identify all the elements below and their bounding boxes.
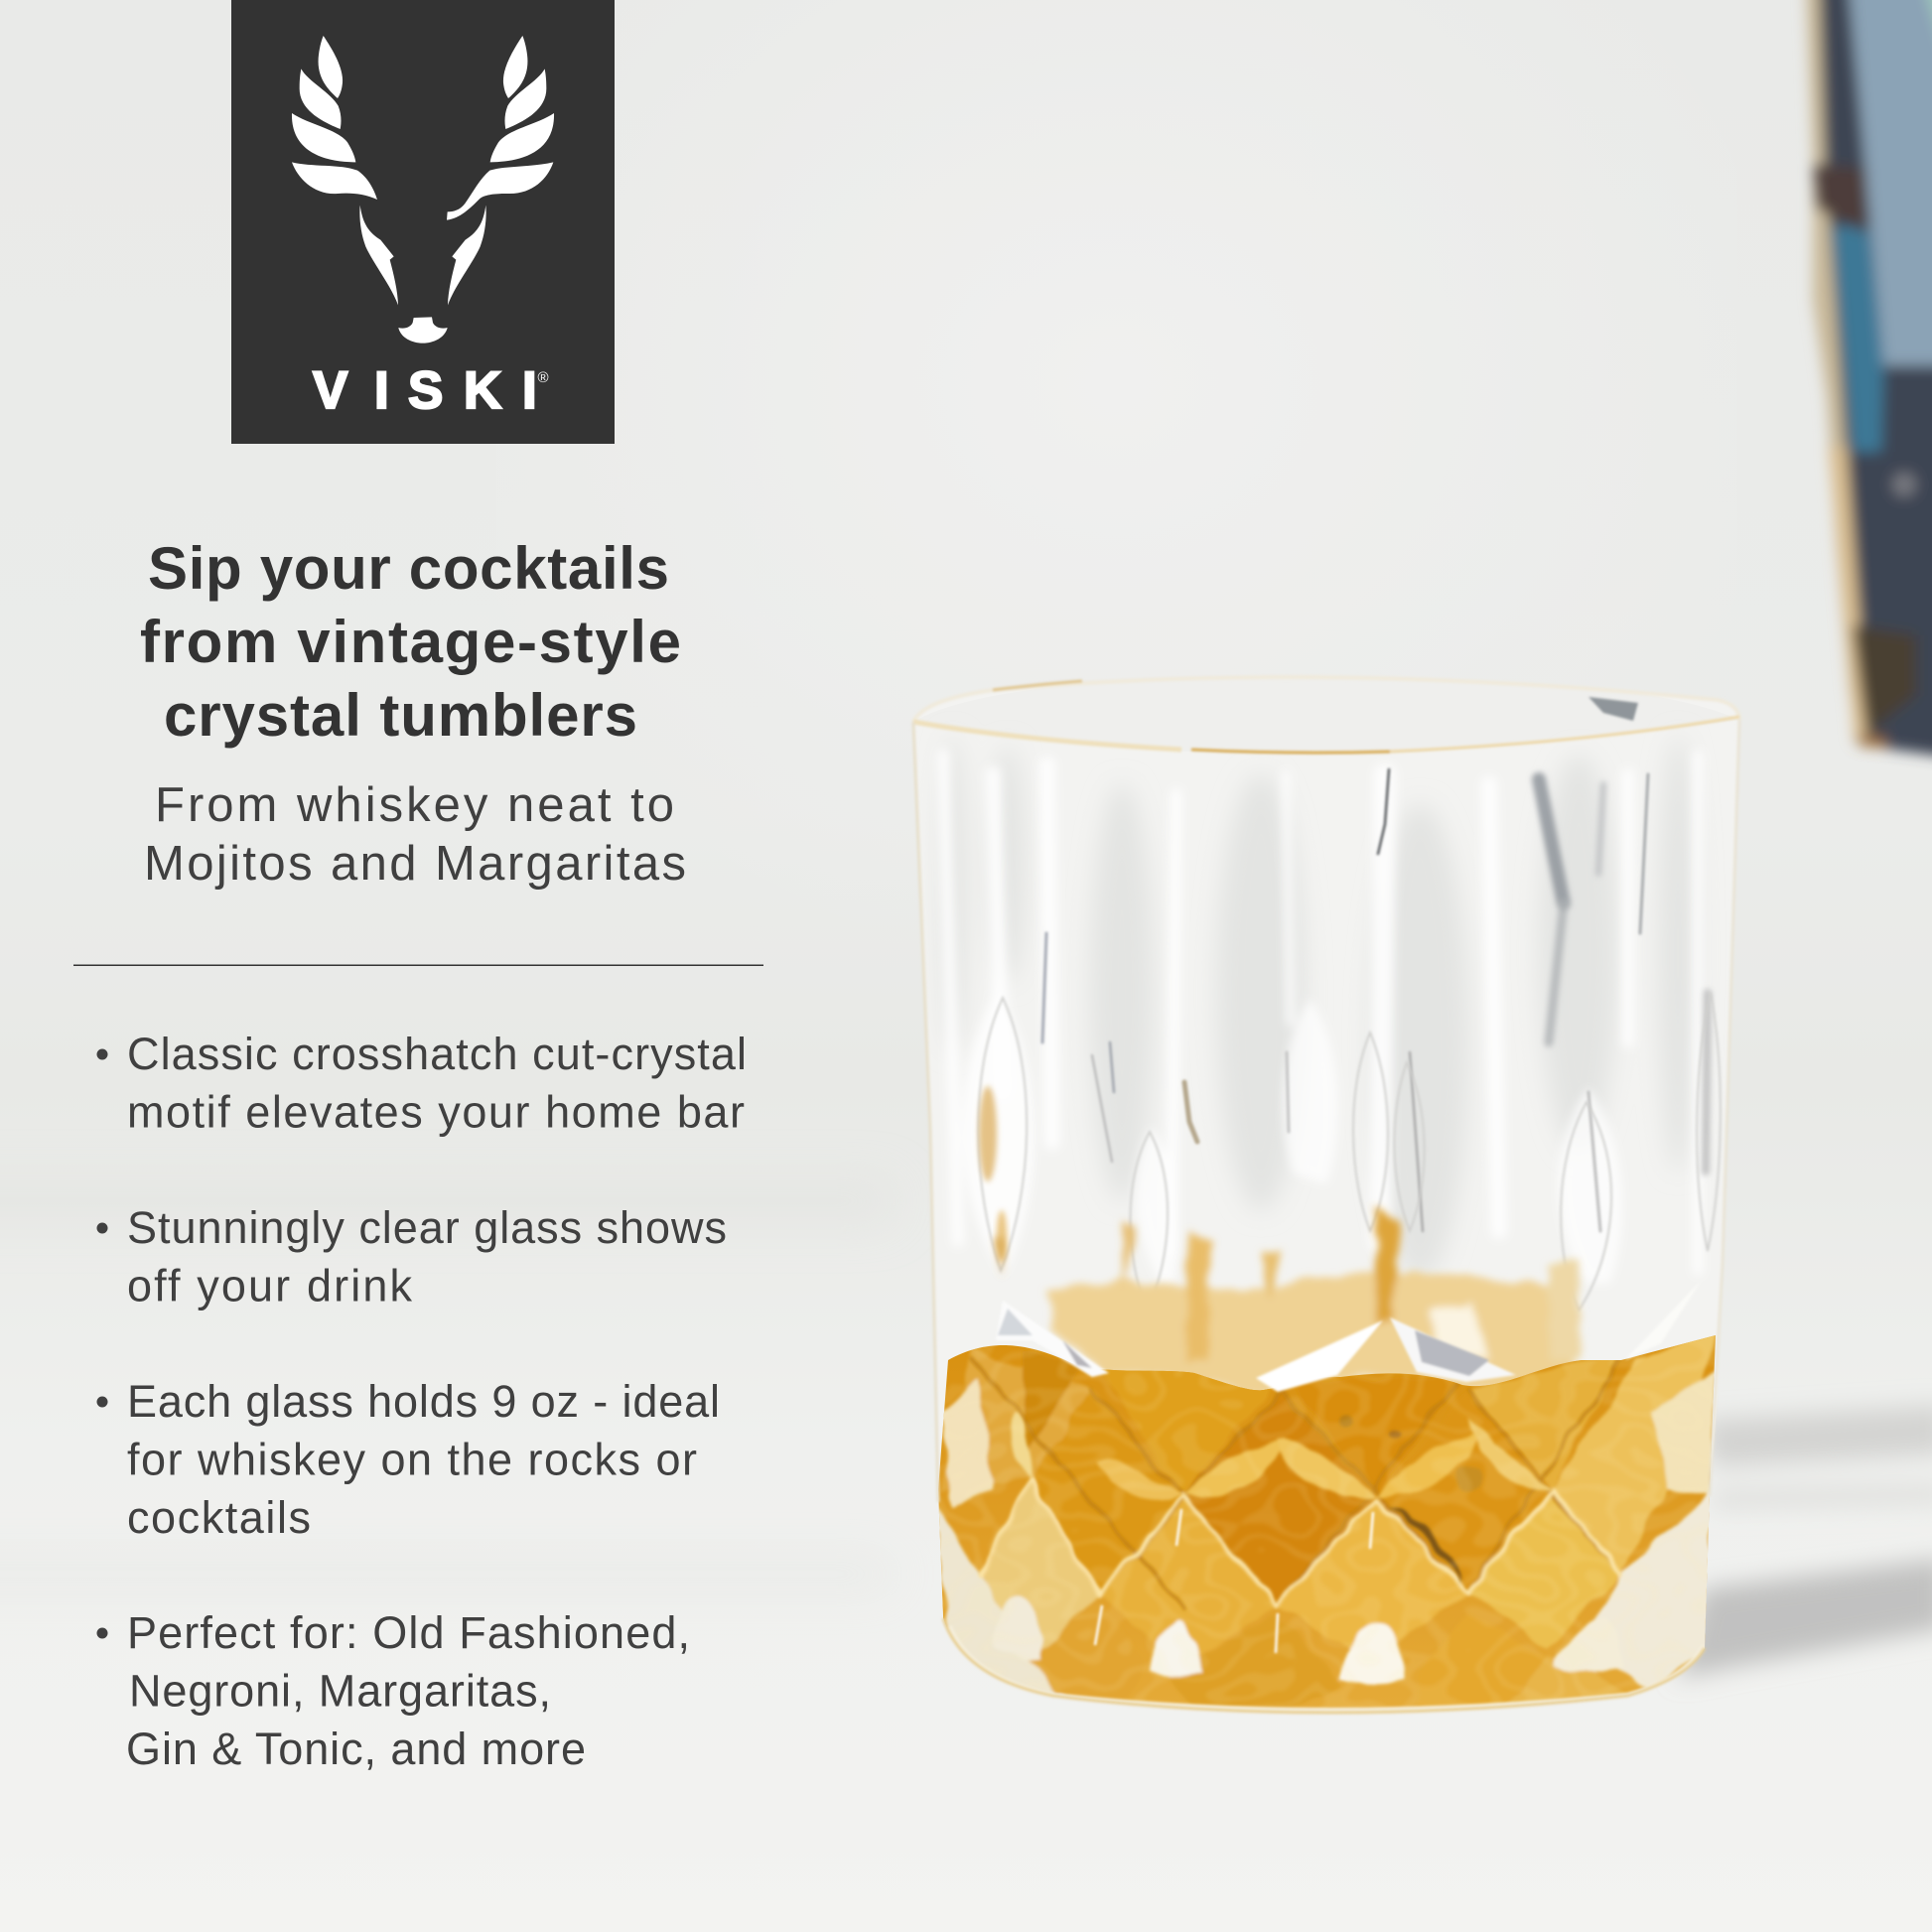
clear upper cut diamonds bbox=[998, 1304, 1640, 1394]
caustic ripples bbox=[923, 1330, 1727, 1727]
base glass edge bbox=[945, 1628, 1708, 1715]
bullet: clear glass: off your drink bbox=[127, 1261, 413, 1311]
glass body bbox=[925, 700, 1735, 1713]
clear peaks under the zigzag bbox=[1150, 1621, 1201, 1676]
subheading bbox=[144, 778, 686, 891]
white flute highlights bbox=[943, 755, 1698, 1281]
bullet: crosshatch motif: Classic crosshatch cut-crystal bbox=[127, 1029, 747, 1079]
bullet: crosshatch motif bbox=[97, 1029, 747, 1138]
bullet: clear glass bbox=[97, 1202, 727, 1311]
heading: Sip your cocktails bbox=[148, 535, 669, 602]
logo wordmark: VISKI bbox=[313, 361, 537, 420]
cast shadow on table bbox=[1678, 1405, 1932, 1678]
bullet: 9 oz capacity bbox=[97, 1376, 720, 1543]
blurred book at top right bbox=[1805, 0, 1932, 759]
crystal tumbler with whiskey bbox=[894, 655, 1767, 1747]
bullet: perfect for: Gin & Tonic, and more bbox=[126, 1724, 586, 1774]
bullet: 9 oz capacity: cocktails bbox=[127, 1492, 311, 1543]
crosshatch cut lines bbox=[973, 1360, 1621, 1608]
soft grey flute shading bbox=[939, 735, 1698, 1281]
lens cuts bbox=[978, 993, 1721, 1311]
heading: crystal tumblers bbox=[164, 682, 637, 749]
bullet: perfect for: Negroni, Margaritas, bbox=[129, 1666, 551, 1716]
logo panel bbox=[231, 0, 615, 444]
divider rule bbox=[73, 965, 763, 966]
cut facets bbox=[933, 1330, 1718, 1713]
whiskey in cut base bbox=[938, 1335, 1716, 1712]
bullet: 9 oz capacity: for whiskey on the rocks or bbox=[127, 1434, 697, 1485]
bullet: perfect for: Perfect for: Old Fashioned, bbox=[127, 1607, 690, 1658]
dark flute accents bbox=[1539, 779, 1708, 1172]
subheading: Mojitos and Margaritas bbox=[144, 837, 686, 891]
bullet: perfect for bbox=[97, 1607, 690, 1774]
star petals bbox=[1011, 1414, 1554, 1584]
whiskey seen through upper glass bbox=[996, 1206, 1579, 1395]
bullet: crosshatch motif: motif elevates your home bar bbox=[127, 1086, 745, 1138]
bullet: clear glass: Stunningly clear glass shows bbox=[127, 1202, 727, 1253]
registered mark: ® bbox=[537, 369, 549, 386]
heading: from vintage-style bbox=[140, 609, 681, 675]
rim bbox=[913, 677, 1739, 1713]
subheading: From whiskey neat to bbox=[155, 778, 674, 832]
bright spikes bbox=[1095, 1509, 1373, 1653]
heading bbox=[140, 535, 681, 749]
bullet: 9 oz capacity: Each glass holds 9 oz - ideal bbox=[127, 1376, 720, 1427]
logo mark: stag antlers bbox=[292, 36, 554, 344]
